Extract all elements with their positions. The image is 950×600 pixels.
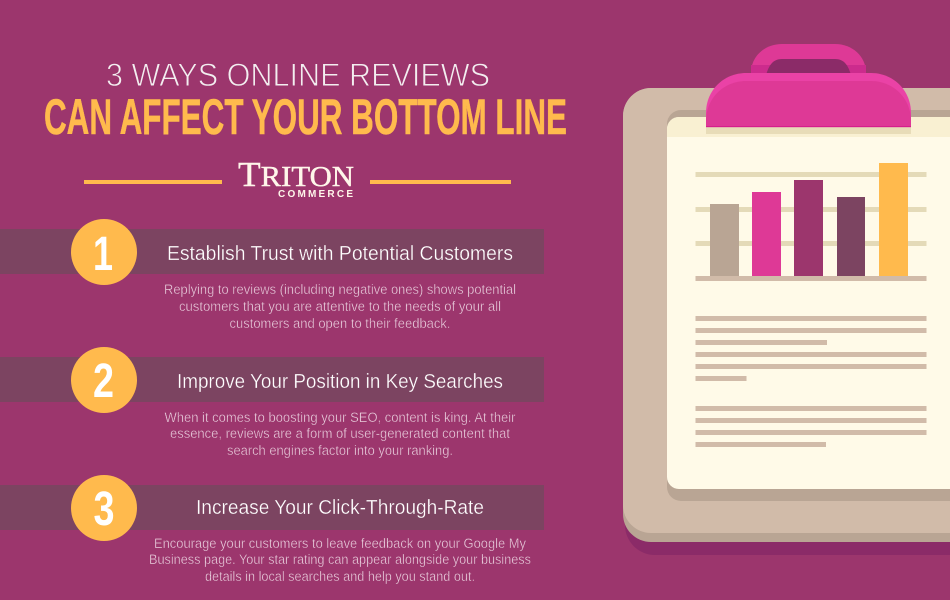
logo: Triton Commerce: COMMERCE — [278, 189, 353, 200]
step 3 heading: Increase Your Click-Through-Rate — [196, 497, 484, 519]
bar chart — [696, 163, 926, 281]
step 3 band — [0, 485, 544, 530]
step 2 body: search engines factor into your ranking. — [227, 443, 453, 458]
paper shadow — [667, 110, 950, 501]
step 2 body: When it comes to boosting your SEO, content is king. At their — [164, 410, 516, 425]
step 3 — [0, 475, 544, 584]
step 3 body — [149, 536, 531, 584]
step 2 number badge: 2 — [93, 355, 114, 408]
logo: Triton Commerce — [84, 155, 511, 200]
step 1 heading: Establish Trust with Potential Customers — [167, 243, 513, 265]
step 2 band — [0, 357, 544, 402]
clip — [706, 73, 911, 134]
step 1 body: Replying to reviews (including negative ones) shows potential — [164, 282, 516, 297]
step 1 number badge — [71, 219, 137, 285]
clip handle — [751, 44, 866, 75]
clipboard illustration — [623, 44, 950, 555]
step 3 body: Business page. Your star rating can appear alongside your business — [149, 552, 531, 567]
step 2 number badge — [71, 347, 137, 413]
title: CAN AFFECT YOUR BOTTOM LINE — [44, 89, 567, 145]
title: 3 WAYS ONLINE REVIEWS — [106, 57, 490, 93]
step 3 body: details in local searches and help you stand out. — [205, 569, 475, 584]
step 3 number badge: 3 — [94, 483, 114, 536]
step 1 body: customers and open to their feedback. — [230, 316, 450, 331]
paper — [667, 117, 950, 489]
step 1 — [0, 219, 544, 331]
title — [44, 57, 567, 145]
paper top band — [667, 117, 950, 137]
logo: Triton Commerce: TRITON — [238, 155, 354, 194]
step 1 number badge: 1 — [93, 228, 113, 281]
board — [623, 88, 950, 533]
step 2 body — [164, 410, 516, 458]
step 3 body: Encourage your customers to leave feedback on your Google My — [154, 536, 526, 551]
step 1 body — [164, 282, 516, 331]
step 1 band — [0, 229, 544, 274]
board edge — [623, 88, 950, 542]
step 2 — [0, 347, 544, 458]
step 2 heading: Improve Your Position in Key Searches — [177, 371, 503, 393]
board shadow — [625, 100, 950, 555]
step 3 number badge — [71, 475, 137, 541]
text lines — [696, 316, 926, 447]
step 1 body: customers that you are attentive to the needs of your all — [179, 299, 501, 314]
step 2 body: essence, reviews are a form of user-generated content that — [170, 426, 510, 441]
